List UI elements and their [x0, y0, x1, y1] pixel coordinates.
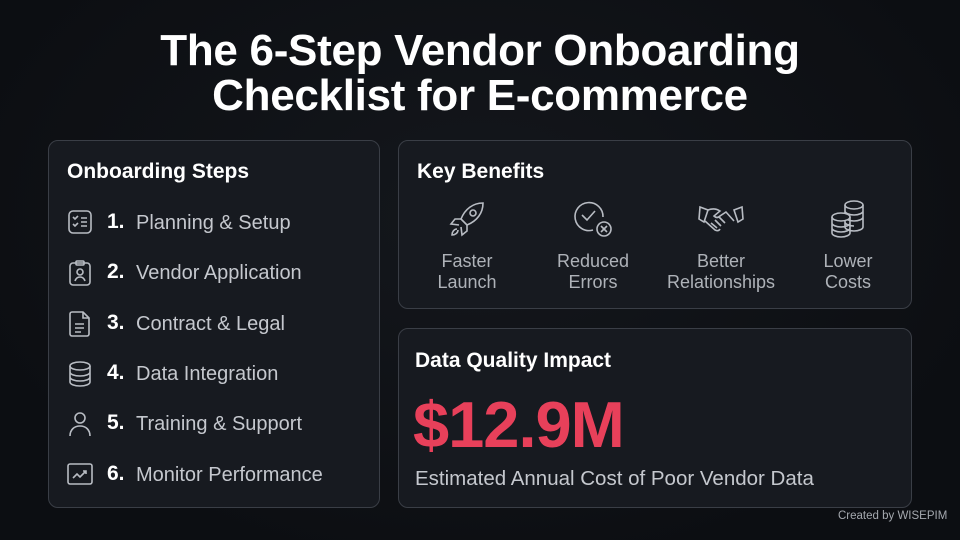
step 6: [67, 462, 323, 486]
panel: key benefits: [398, 140, 912, 309]
subtitle: Estimated Annual Cost of Poor Vendor Data: [415, 467, 814, 490]
benefit: lower costs: [823, 200, 873, 292]
heading: data quality impact: Data Quality Impact: [415, 349, 611, 372]
title: Checklist for E-commerce: [212, 71, 748, 120]
step 2: [69, 260, 302, 286]
heading: onboarding steps: Onboarding Steps: [67, 160, 249, 183]
icon: document: [69, 311, 90, 337]
step 4: 4.: [107, 361, 125, 384]
panel: onboarding steps: [48, 140, 380, 508]
benefit: better relationships: [667, 206, 775, 292]
benefit: better relationships: Relationships: [667, 272, 775, 292]
step 2: Vendor Application: [136, 262, 302, 284]
icon: database: [69, 361, 91, 387]
benefit: reduced errors: [557, 202, 629, 292]
step 5: [69, 411, 302, 436]
benefit: faster launch: [437, 202, 497, 292]
icon: rocket: [450, 202, 484, 236]
step 3: Contract & Legal: [136, 313, 285, 335]
heading: key benefits: Key Benefits: [417, 160, 544, 183]
step 5: Training & Support: [136, 413, 302, 435]
benefit: faster launch: Faster: [441, 251, 492, 271]
step 1: 1.: [107, 210, 125, 233]
big number: $12.9M: [413, 388, 624, 461]
benefit: faster launch: Launch: [437, 272, 497, 292]
credit: Created by WISEPIM: [838, 510, 947, 522]
step 4: Data Integration: [136, 363, 278, 385]
benefit: better relationships: Better: [697, 251, 745, 271]
benefit: lower costs: Costs: [825, 272, 871, 292]
icon: user: [69, 412, 91, 436]
benefit: lower costs: Lower: [823, 251, 873, 271]
step 4: [69, 361, 278, 387]
icon: handshake: [698, 206, 744, 232]
icon: coins: [831, 200, 864, 238]
step 2: 2.: [107, 260, 125, 283]
step 6: Monitor Performance: [136, 464, 323, 486]
icon: clipboard user: [69, 260, 91, 286]
step 1: Planning & Setup: [136, 212, 291, 234]
step 3: 3.: [107, 311, 125, 334]
title: [160, 26, 800, 120]
step 3: [69, 311, 285, 337]
step 1: [68, 210, 291, 234]
panel: data quality impact: [398, 328, 912, 508]
benefit: reduced errors: Errors: [568, 272, 618, 292]
icon: check x: [574, 202, 612, 237]
step 6: 6.: [107, 462, 125, 485]
title: The 6-Step Vendor Onboarding: [160, 26, 800, 75]
step 5: 5.: [107, 411, 125, 434]
icon: chart: [67, 463, 93, 485]
benefit: reduced errors: Reduced: [557, 251, 629, 271]
icon: checklist: [68, 210, 92, 234]
